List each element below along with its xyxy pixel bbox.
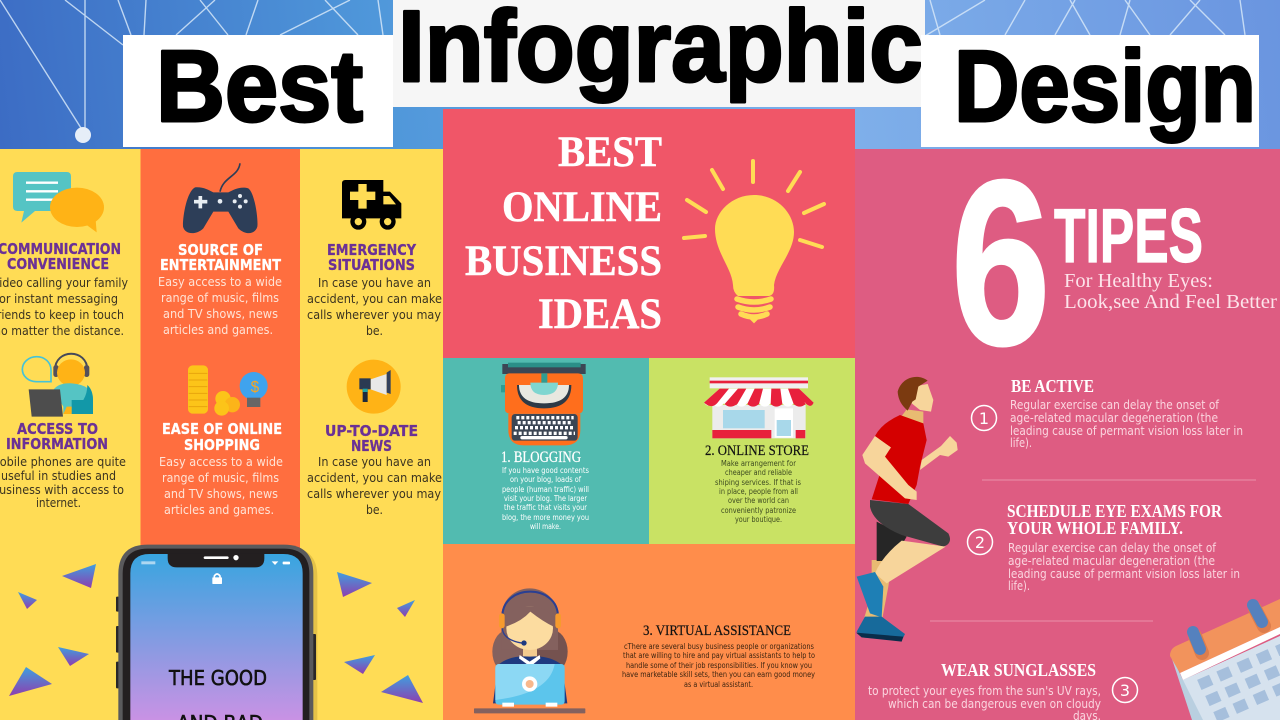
heading: ease of online shopping: SHOPPING (184, 436, 260, 454)
decorative triangles (9, 564, 423, 703)
text: schedule body: age-related macular degeneration (the (1008, 554, 1215, 568)
heading: schedule eye exams (1007, 501, 1223, 538)
text: blogging body: If you have good contents (502, 466, 589, 475)
heading: communication convenience (0, 240, 121, 273)
heading: best online business ideas: BUSINESS (465, 238, 662, 285)
text: emergency body (307, 276, 442, 338)
text: online store body: in place, people from all (719, 487, 798, 496)
tip 1: be active (972, 376, 1243, 450)
heading: emergency situations: EMERGENCY (327, 241, 417, 259)
panel: best online business ideas (443, 109, 855, 359)
heading: up-to-date news: NEWS (351, 437, 392, 455)
icon: number 1 (972, 406, 996, 430)
text: shopping body: and TV shows, news (164, 487, 278, 501)
icon: number 1: 1 (979, 409, 989, 428)
icon: typewriter (501, 363, 586, 445)
text: news body: calls wherever you may (307, 487, 441, 501)
text: online store body: your boutique. (735, 515, 782, 524)
text: virtual assistance body (622, 642, 815, 689)
text: schedule body: Regular exercise can delay the onset of (1008, 541, 1217, 555)
text: blogging body (502, 466, 589, 531)
heading: communication convenience: COMMUNICATION (0, 240, 121, 258)
heading: blogging: 1. BLOGGING (501, 449, 581, 466)
text: shopping body: articles and games. (164, 503, 274, 517)
heading: source of entertainment (160, 241, 282, 274)
text: access body (0, 455, 126, 510)
icon: game controller (183, 163, 258, 233)
panel: online store (649, 358, 855, 544)
text: online store body: Make arrangement for (721, 459, 797, 468)
illustration: calendar (1170, 599, 1280, 720)
heading: online store: 2. ONLINE STORE (705, 443, 809, 459)
text: access body: internet. (36, 496, 81, 510)
text: news body: be. (366, 503, 383, 517)
text: blogging body: will make. (530, 522, 561, 531)
text: blogging body: visit your blog. The larger (504, 494, 588, 503)
heading: access to information (6, 420, 108, 453)
text: entertainment body: and TV shows, news (163, 307, 278, 321)
text: shopping body: range of music, films (162, 471, 279, 485)
icon: megaphone (347, 360, 401, 414)
text: subtitle (1064, 271, 1278, 313)
heading: tipes: TIPES (1054, 194, 1203, 279)
text: blogging body: on your blog, loads of (510, 475, 581, 484)
text: sunglasses body: to protect your eyes from the sun's UV rays, (868, 684, 1101, 698)
text: entertainment body: articles and games. (163, 323, 273, 337)
icon: woman with headset at laptop (474, 588, 585, 713)
heading: source of entertainment: SOURCE OF (178, 241, 263, 259)
panel: blogging (443, 358, 649, 544)
panel: six tips for healthy eyes (855, 132, 1280, 720)
panel: virtual assistance (443, 544, 855, 720)
background: blue network banner (0, 0, 1280, 150)
icon: coins and money bulb: $ (251, 379, 260, 396)
text: virtual assistance body: handle some of their job responsibilities. If you know you (626, 661, 812, 670)
text: entertainment body: range of music, films (161, 291, 279, 305)
text: online store body: conveniently patronize (721, 506, 796, 515)
heading: ease of online shopping (162, 420, 282, 454)
text: communication body (0, 276, 128, 338)
icon: number 3: 3 (1120, 681, 1130, 700)
heading: ease of online shopping: EASE OF ONLINE (162, 420, 282, 438)
illustration: runner (856, 377, 958, 642)
text: shopping body: Easy access to a wide (159, 455, 283, 469)
icon: number 3 (1112, 678, 1138, 702)
icon: number 2 (968, 530, 992, 554)
text: blogging body: the traffic that visits your (504, 503, 588, 512)
heading: communication convenience: CONVENIENCE (7, 255, 109, 273)
heading: access to information: INFORMATION (6, 435, 108, 453)
heading: up-to-date news (325, 422, 418, 455)
tip 2: schedule eye exams (968, 501, 1240, 593)
icon: person with headset and laptop (22, 354, 93, 417)
icon: number 2: 2 (975, 533, 985, 552)
heading: wear sunglasses: WEAR SUNGLASSES (941, 660, 1096, 680)
text: entertainment body: Easy access to a wide (158, 275, 282, 289)
text: be active body: leading cause of permant vision loss later in (1010, 424, 1243, 438)
heading: schedule eye exams: SCHEDULE EYE EXAMS FOR (1007, 501, 1223, 521)
icon: ambulance (342, 180, 401, 230)
icon: speech bubbles (13, 172, 104, 232)
heading: up-to-date news: UP-TO-DATE (325, 422, 418, 440)
text: emergency body: In case you have an (318, 276, 431, 290)
text: blogging body: blog, the more money you (502, 513, 589, 522)
heading: emergency situations (327, 241, 417, 274)
text: news body: In case you have an (318, 455, 431, 469)
heading: big number 6: 6 (951, 132, 1050, 395)
text: online store body: over the world can (728, 496, 789, 505)
phone mockup (116, 545, 317, 720)
text: blogging body: people (human traffic) will (502, 485, 589, 494)
text: online store body (715, 459, 801, 524)
text: schedule body: life). (1008, 579, 1030, 593)
heading: best online business ideas (465, 129, 662, 338)
text: be active body (1010, 398, 1243, 450)
icon: light bulb (684, 161, 824, 322)
heading: emergency situations: SITUATIONS (328, 256, 415, 274)
heading: best online business ideas: IDEAS (538, 291, 662, 338)
tip 3: wear sunglasses (868, 660, 1138, 720)
text: virtual assistance body: cThere are several busy business people or organizations (624, 642, 814, 651)
heading: access to information: ACCESS TO (17, 420, 98, 438)
text: emergency body: calls wherever you may (307, 308, 441, 322)
heading: best online business ideas: BEST (558, 129, 662, 176)
text: sunglasses body (868, 684, 1101, 720)
text: emergency body: accident, you can make (307, 292, 442, 306)
heading: best online business ideas: ONLINE (502, 184, 662, 231)
text: news body (307, 455, 442, 517)
text: schedule body (1008, 541, 1240, 593)
text: emergency body: be. (366, 324, 383, 338)
icon: coins and money bulb (188, 365, 268, 416)
text: schedule body: leading cause of permant vision loss later in (1008, 567, 1240, 581)
text: sunglasses body: which can be dangerous even on cloudy (888, 697, 1101, 711)
text: online store body: shiping services. If that is (715, 478, 801, 487)
text: news body: accident, you can make (307, 471, 442, 485)
text: be active body: age-related macular degeneration (the (1010, 411, 1218, 425)
heading: be active: BE ACTIVE (1011, 376, 1094, 396)
text: virtual assistance body: have marketable skill sets, then you can earn good money (622, 670, 815, 679)
heading: source of entertainment: ENTERTAINMENT (160, 256, 282, 274)
icon: storefront (704, 377, 814, 438)
text: access body: useful in studies and (1, 469, 116, 483)
text: be active body: Regular exercise can delay the onset of (1010, 398, 1220, 412)
title word: Best: Best (156, 31, 363, 143)
heading: virtual assistance: 3. VIRTUAL ASSISTANCE (643, 623, 791, 639)
text: virtual assistance body: that are willing to hire and pay virtual assistants to help to (623, 651, 815, 660)
text: online store body: cheaper and reliable (725, 468, 792, 477)
phone mockup: THE GOOD (168, 666, 267, 690)
text: be active body: life). (1010, 436, 1032, 450)
text: shopping body (159, 455, 283, 517)
text: virtual assistance body: as a virtual assistant. (684, 680, 753, 689)
text: subtitle: Look,see And Feel Better (1064, 292, 1278, 313)
panel: mobile phone benefits (0, 149, 443, 720)
text: subtitle: For Healthy Eyes: (1064, 271, 1213, 292)
text: entertainment body (158, 275, 282, 337)
heading: schedule eye exams: YOUR WHOLE FAMILY. (1007, 518, 1183, 538)
